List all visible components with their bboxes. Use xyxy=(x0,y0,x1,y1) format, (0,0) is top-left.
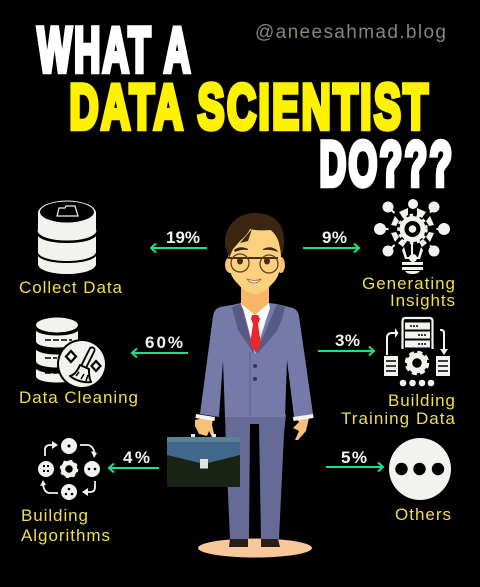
arrow: 60 percent xyxy=(132,333,188,358)
shoes xyxy=(229,539,280,547)
left hand xyxy=(195,418,215,438)
shirt collar xyxy=(240,303,270,354)
ears xyxy=(225,257,235,273)
arrow: 3 percent: 3% xyxy=(335,331,360,350)
label: building algorithms: Algorithms xyxy=(21,526,110,545)
arrow: 5 percent: 5% xyxy=(341,448,367,467)
briefcase xyxy=(167,434,240,487)
shirt cuffs xyxy=(196,414,314,421)
face xyxy=(228,225,281,294)
label: building training data: Building xyxy=(388,391,455,410)
mouth xyxy=(247,279,261,283)
jacket xyxy=(200,303,313,417)
icon: data cleaning xyxy=(36,318,107,389)
label: building algorithms: Building xyxy=(21,506,88,525)
buttons xyxy=(253,364,257,368)
icon: building training data xyxy=(384,318,450,386)
eyebrows xyxy=(234,247,278,252)
arrow: 9 percent: 9% xyxy=(322,228,347,247)
watermark: @aneesahmad.blog xyxy=(255,22,446,43)
glasses xyxy=(228,257,278,259)
hair xyxy=(225,213,284,258)
label: collect data: Collect Data xyxy=(19,278,123,297)
icon: others xyxy=(389,438,451,500)
tie xyxy=(250,315,261,353)
arrow: 5 percent xyxy=(326,448,383,472)
title: what a: WHAT A xyxy=(38,16,192,86)
eyes xyxy=(237,258,243,264)
icon: building algorithms xyxy=(38,438,100,500)
arrow: 4 percent: 4% xyxy=(123,448,150,467)
arrow: 3 percent xyxy=(318,331,374,356)
lapels xyxy=(232,304,285,354)
right hand xyxy=(293,418,309,440)
icon: collect data database xyxy=(38,201,96,274)
icon: generating insights xyxy=(374,199,450,274)
label: data cleaning: Data Cleaning xyxy=(19,388,138,407)
arrow: 19 percent: 19% xyxy=(166,228,200,247)
arrow: 9 percent xyxy=(303,228,359,252)
trousers xyxy=(225,414,286,539)
broom xyxy=(70,350,92,382)
label: generating insights: Generating xyxy=(362,274,455,293)
label: generating insights: Insights xyxy=(390,291,455,310)
label: others: Others xyxy=(395,505,451,524)
floor ellipse xyxy=(198,538,312,558)
neck xyxy=(241,285,269,317)
arrow: 4 percent xyxy=(109,448,159,472)
arrow: 60 percent: 60% xyxy=(145,333,183,352)
arrow: 19 percent xyxy=(151,228,207,252)
figure: data scientist character xyxy=(195,213,314,558)
label: building training data: Training Data xyxy=(341,409,456,428)
